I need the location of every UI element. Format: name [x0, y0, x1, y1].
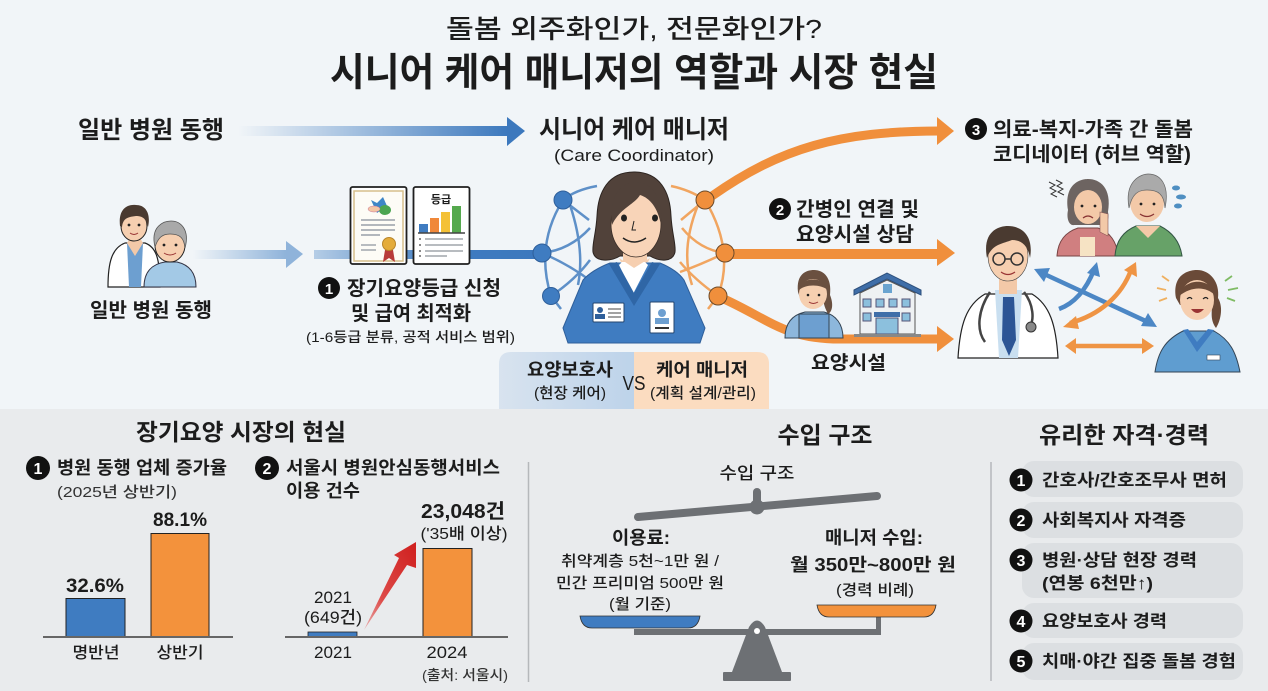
fee line 1: 취약계층 5천~1만 원 / — [561, 553, 720, 570]
step 1 heading line 1: 장기요양등급 신청 — [347, 277, 501, 300]
vs label: VS — [622, 373, 646, 395]
step 1 heading line 2: 및 급여 최적화 — [351, 302, 471, 325]
number badge 2: 2 — [263, 461, 272, 478]
number badge 3: 3 — [972, 122, 980, 139]
top background — [0, 0, 1268, 409]
item 2 — [1010, 502, 1243, 538]
income line 1: 월 350만~800만 원 — [790, 555, 956, 575]
bar: 2024 — [423, 548, 472, 636]
item 1: 1 — [1017, 473, 1026, 490]
right badge — [650, 302, 674, 333]
note 35x: ('35배 이상) — [420, 525, 508, 543]
value 23,048: 23,048건 — [421, 500, 505, 523]
text: step 1 grade application — [306, 277, 515, 345]
title line 1: 돌봄 외주화인가, 전문화인가? — [446, 14, 822, 44]
arrow: growth — [364, 542, 416, 630]
fee heading: 이용료: — [612, 528, 670, 548]
chart 1 title: 병원 동행 업체 증가율 — [57, 458, 227, 478]
item 2: 사회복지사 자격증 — [1042, 511, 1186, 530]
step 2 line 1: 간병인 연결 및 — [796, 198, 919, 221]
bar: 2021 — [308, 632, 357, 637]
title — [330, 14, 938, 95]
axis label: previous: 명반년 — [72, 644, 120, 662]
2021 label: 2021 — [314, 588, 352, 607]
number badge 1: 1 — [325, 281, 333, 298]
orange pan — [817, 605, 936, 617]
item 5: 치매·야간 집중 돌봄 경험 — [1042, 652, 1236, 671]
left badge — [593, 303, 624, 322]
value 32.6%: 32.6% — [66, 576, 124, 597]
icon: caregiver — [785, 270, 843, 338]
icon: certificate — [350, 187, 406, 264]
label: general hospital escort: 일반 병원 동행 — [90, 299, 212, 322]
item 3: 병원·상담 현장 경력 — [1042, 551, 1197, 570]
care worker note: (현장 케어) — [534, 385, 606, 402]
stand — [723, 620, 791, 681]
chart 2 title: 서울시 병원안심동행서비스 — [286, 458, 500, 478]
2021 axis label: 2021 — [314, 643, 352, 662]
value 88.1%: 88.1% — [153, 510, 207, 531]
item 4: 요양보호사 경력 — [1042, 612, 1167, 631]
scale label: 수입 구조 — [720, 464, 794, 483]
heading: income structure: 수입 구조 — [778, 422, 872, 448]
text: step 3 hub role — [965, 118, 1193, 166]
care manager note: (계획 설계/관리) — [650, 385, 756, 402]
income line 2: (경력 비례) — [836, 582, 914, 599]
line: grade application to manager — [314, 250, 544, 259]
icon: doctor and senior — [108, 205, 196, 287]
icon: nurse — [1155, 270, 1240, 372]
arrow: escort to grade application — [193, 241, 303, 268]
income heading: 매니저 수입: — [825, 528, 923, 548]
center heading: senior care manager — [539, 116, 729, 165]
blue pan — [580, 616, 700, 628]
item 4: 4 — [1017, 614, 1026, 631]
title line 2: 시니어 케어 매니저의 역할과 시장 현실 — [330, 52, 938, 95]
icon: worried family — [1049, 174, 1186, 256]
arm — [634, 616, 881, 635]
bar: first half — [151, 534, 209, 636]
step 3 line 1: 의료-복지-가족 간 돌봄 — [993, 118, 1193, 141]
bar: previous — [66, 598, 125, 636]
arrow: escort to senior care manager — [238, 117, 525, 146]
chart 1: growth of hospital escort businesses — [26, 456, 233, 662]
chart 2: Seoul escort service usage — [255, 456, 508, 683]
item 4 — [1010, 603, 1243, 638]
item 3: (연봉 6천만↑) — [1042, 574, 1153, 593]
beam — [638, 488, 877, 517]
item 1 — [1010, 461, 1243, 497]
center heading: senior care manager: 시니어 케어 매니저 — [539, 116, 729, 144]
number badge 3 — [965, 118, 987, 140]
icon: grade document: 등급 — [431, 193, 451, 206]
icon: care manager figure — [563, 172, 705, 343]
item 5 — [1010, 643, 1243, 680]
network: orange nodes — [671, 186, 734, 309]
item 2: 2 — [1017, 513, 1026, 530]
number badge 1: 1 — [34, 461, 43, 478]
fee line 2: 민간 프리미엄 500만 원 — [556, 575, 724, 592]
step 1 note: (1-6등급 분류, 공적 서비스 범위) — [306, 329, 515, 345]
chart 2 title line 2: 이용 건수 — [286, 481, 360, 501]
number badge 2 — [255, 456, 279, 480]
care worker label: 요양보호사 — [527, 360, 613, 380]
center subheading: (Care Coordinator) — [554, 146, 714, 165]
heading: favorable qualifications: 유리한 자격·경력 — [1039, 422, 1209, 448]
list: qualifications — [1010, 461, 1243, 680]
step 3 line 2: 코디네이터 (허브 역할) — [993, 143, 1191, 166]
heading: long-term care market: 장기요양 시장의 현실 — [136, 419, 346, 445]
text: step 2 caregiver connection — [769, 198, 919, 246]
item 3: 3 — [1017, 553, 1026, 570]
top heading: general hospital escort: 일반 병원 동행 — [78, 117, 224, 144]
number badge 2: 2 — [776, 202, 784, 219]
hub connection arrows — [1034, 262, 1157, 354]
icon: grade document — [414, 187, 470, 264]
2021 count: (649건) — [304, 608, 362, 627]
source: (출처: 서울시) — [422, 667, 508, 683]
item 3 — [1010, 543, 1243, 598]
item 1: 간호사/간호조무사 면허 — [1042, 471, 1227, 490]
label: nursing facility: 요양시설 — [811, 352, 886, 374]
step 2 line 2: 요양시설 상담 — [796, 223, 914, 246]
icon: doctor — [958, 226, 1058, 358]
care manager label: 케어 매니저 — [656, 360, 748, 380]
fee line 3: (월 기준) — [609, 596, 671, 613]
number badge 1 — [318, 277, 340, 299]
item 5: 5 — [1017, 654, 1026, 671]
number badge 2 — [769, 198, 791, 220]
axis label: first half: 상반기 — [156, 644, 204, 662]
comparison box: care worker vs care manager — [499, 352, 769, 409]
orange arrows to destinations — [712, 117, 955, 352]
number badge 1 — [26, 456, 50, 480]
balance scale: income structure — [556, 464, 956, 681]
network: blue nodes — [533, 186, 597, 309]
chart 1 subtitle: (2025년 상반기) — [57, 484, 177, 501]
icon: nursing facility — [854, 273, 921, 337]
bottom background panel — [0, 409, 1268, 691]
2024 axis label: 2024 — [426, 643, 468, 662]
